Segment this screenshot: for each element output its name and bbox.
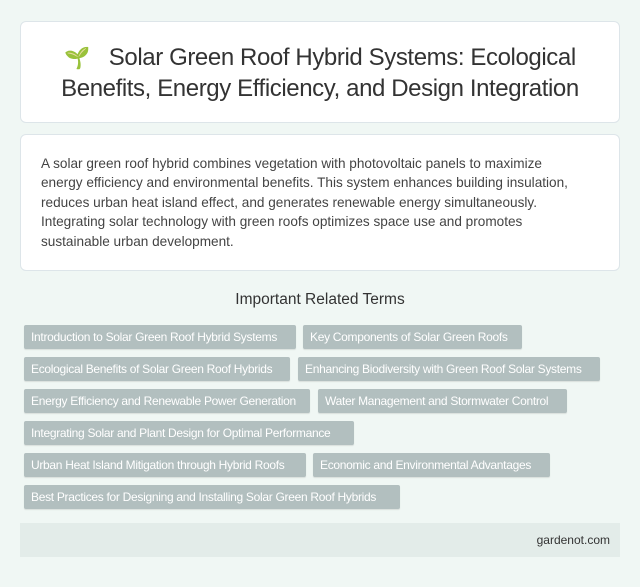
description card: Integrating solar technology with green roofs optimizes space use and promotes: [41, 214, 522, 229]
tags: Integrating Solar and Plant Design for Optimal Performance: [31, 426, 330, 440]
tags: Energy Efficiency and Renewable Power Generation: [31, 394, 296, 408]
heading: related terms: Important Related Terms: [235, 291, 405, 308]
tags: Enhancing Biodiversity with Green Roof Solar Systems: [305, 362, 582, 376]
tags: Economic and Environmental Advantages: [320, 458, 531, 472]
footer: [20, 523, 620, 557]
title card: 🌱 Solar Green Roof Hybrid Systems: Ecological: [64, 44, 576, 71]
title card: [20, 21, 620, 123]
tags: Best Practices for Designing and Installing Solar Green Roof Hybrids: [31, 490, 376, 504]
description card: A solar green roof hybrid combines vegetation with photovoltaic panels to maximize: [41, 156, 542, 171]
tags: Ecological Benefits of Solar Green Roof Hybrids: [31, 362, 272, 376]
footer: gardenot.com: [537, 533, 610, 547]
tags: Key Components of Solar Green Roofs: [310, 330, 508, 344]
tags: Introduction to Solar Green Roof Hybrid Systems: [31, 330, 277, 344]
description card: sustainable urban development.: [41, 234, 234, 249]
description card: reduces urban heat island effect, and generates renewable energy simultaneously.: [41, 195, 537, 210]
tags: Urban Heat Island Mitigation through Hybrid Roofs: [31, 458, 284, 472]
tags: Water Management and Stormwater Control: [325, 394, 548, 408]
description card: [20, 134, 620, 271]
title card: Benefits, Energy Efficiency, and Design Integration: [61, 75, 579, 102]
description card: energy efficiency and environmental benefits. This system enhances building insulation,: [41, 175, 568, 190]
